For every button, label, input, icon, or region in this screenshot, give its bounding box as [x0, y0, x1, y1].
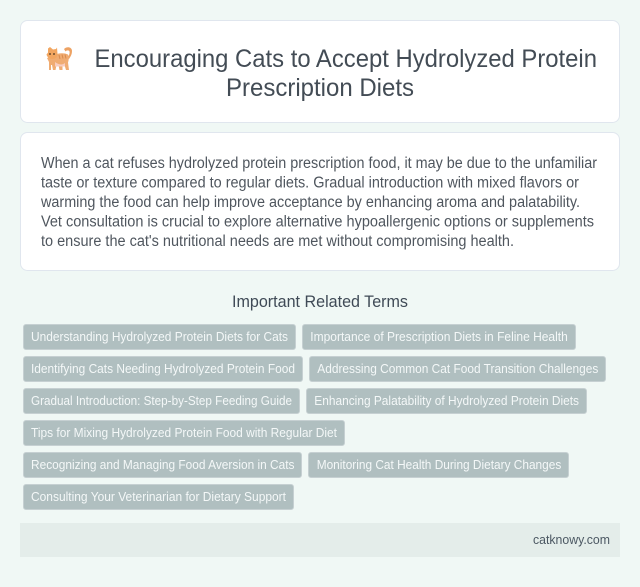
- tag: Tips for Mixing Hydrolyzed Protein Food with Regular Diet: [31, 426, 337, 440]
- tag: [308, 452, 568, 478]
- tag: Addressing Common Cat Food Transition Challenges: [317, 362, 598, 376]
- tag: Importance of Prescription Diets in Feline Health: [310, 330, 568, 344]
- tag: Identifying Cats Needing Hydrolyzed Protein Food: [31, 362, 295, 376]
- tag: [302, 324, 576, 350]
- tag: [24, 420, 344, 446]
- footer: catknowy.com: [533, 532, 610, 547]
- tag: Consulting Your Veterinarian for Dietary Support: [31, 490, 286, 504]
- text block: description: Vet consultation is crucial to explore alternative hypoallergenic options or supplements: [41, 214, 594, 230]
- title: [94, 46, 597, 102]
- text block: description: [40, 155, 597, 250]
- text block: description: taste or texture compared to regular diets. Gradual introduction with mixed flavors or: [41, 174, 579, 192]
- footer: [20, 523, 620, 557]
- title: Encouraging Cats to Accept Hydrolyzed Protein: [94, 46, 597, 73]
- heading: important related terms: Important Related Terms: [232, 293, 408, 311]
- tag: [24, 388, 300, 414]
- panel: title card: [20, 20, 620, 122]
- icon: cat: [46, 47, 72, 70]
- tag: Gradual Introduction: Step-by-Step Feeding Guide: [31, 394, 292, 408]
- tag: [306, 388, 586, 414]
- tag: [310, 356, 606, 382]
- text block: description: When a cat refuses hydrolyzed protein prescription food, it may be due to the unfamiliar: [41, 155, 597, 172]
- tag: [24, 484, 294, 510]
- panel: description card: [20, 132, 620, 270]
- tag: Monitoring Cat Health During Dietary Changes: [317, 458, 561, 472]
- text block: description: warming the food can help improve acceptance by enhancing aroma and palatability.: [40, 194, 580, 211]
- tag: Recognizing and Managing Food Aversion in Cats: [31, 458, 294, 472]
- tag: [24, 452, 302, 478]
- tag list: [24, 324, 606, 510]
- text block: description: to ensure the cat's nutritional needs are met without compromising health.: [41, 233, 514, 250]
- tag: [24, 356, 302, 382]
- tag: Enhancing Palatability of Hydrolyzed Protein Diets: [314, 394, 579, 408]
- title: Prescription Diets: [226, 75, 414, 102]
- tag: [24, 324, 296, 350]
- tag: Understanding Hydrolyzed Protein Diets for Cats: [31, 330, 288, 344]
